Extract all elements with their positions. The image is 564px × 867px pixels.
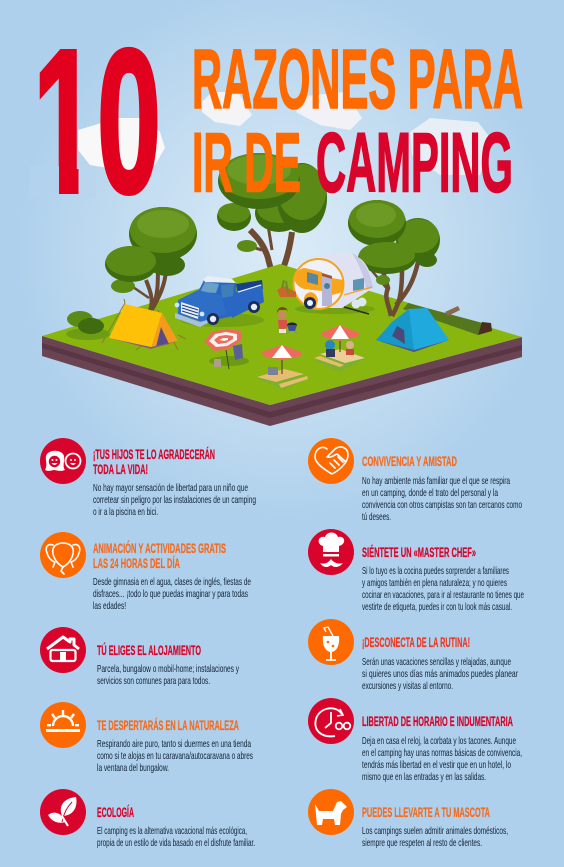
panel: reason 2 bbox=[40, 532, 251, 612]
picnic table: centre bbox=[256, 345, 308, 390]
panel: reason 8 bbox=[308, 619, 518, 692]
panel: reason 2: disfraces... ¡todo lo que puedas imaginar y para todas bbox=[93, 589, 248, 600]
panel: reason 8: excursiones y visitas al entorno. bbox=[362, 681, 453, 692]
heading: ¡DESCONECTA DE LA RUTINA! bbox=[362, 635, 470, 650]
body text: Parcela, bungalow o mobil-home; instalaciones y bbox=[97, 664, 240, 675]
icon: sunrise bbox=[40, 702, 86, 748]
tent: yellow bbox=[102, 299, 186, 350]
panel: reason 3 bbox=[40, 627, 240, 687]
icon: leaves bbox=[40, 789, 86, 835]
tree: centre bbox=[217, 153, 327, 290]
panel: reason 9 bbox=[308, 698, 522, 783]
panel: reason 2: LAS 24 HORAS DEL DÍA bbox=[93, 556, 180, 571]
heading: ECOLOGÍA bbox=[97, 805, 134, 820]
panel: reason 1: corretear sin peligro por las instalaciones de un camping bbox=[93, 495, 256, 506]
icon: children faces bbox=[40, 438, 86, 484]
panel: reason 4: como si te alojas en tu caravana/autocaravana o abres bbox=[97, 751, 253, 762]
heading: TE DESPERTARÁS EN LA NATURALEZA bbox=[97, 718, 239, 733]
umbrella and chairs: left bbox=[204, 329, 249, 369]
bush bbox=[66, 311, 110, 340]
clouds bbox=[78, 92, 492, 175]
panel: reason 4: la ventana del bungalow. bbox=[97, 763, 169, 774]
panel: reason 10: siempre que respeten al resto de clientes. bbox=[362, 838, 482, 849]
log bbox=[403, 303, 492, 335]
panel: reason 10 bbox=[308, 789, 508, 849]
panel: reason 9: mismo que en las entradas y en las salidas. bbox=[362, 772, 486, 783]
body text: Respirando aire puro, tanto si duermes en una tienda bbox=[97, 739, 251, 750]
panel: reason 1: TODA LA VIDA! bbox=[93, 462, 148, 477]
title number: 10: 10 bbox=[33, 7, 161, 236]
tent: blue bbox=[376, 308, 449, 352]
heading: ¡TUS HIJOS TE LO AGRADECERÁN bbox=[93, 447, 215, 462]
panel: reason 3: servicios son comunes para para todos. bbox=[97, 676, 210, 687]
icon: clock with infinity bbox=[308, 698, 354, 744]
heading: ANIMACIÓN Y ACTIVIDADES GRATIS bbox=[93, 541, 226, 556]
heading: SIÉNTETE UN «MASTER CHEF» bbox=[362, 545, 476, 560]
tree: left bbox=[105, 207, 197, 310]
icon: chef hat and moustache bbox=[308, 529, 354, 575]
body text: No hay mayor sensación de libertad para un niño que bbox=[93, 483, 248, 494]
body text: El camping es la alternativa vacacional más ecológica, bbox=[97, 826, 247, 837]
icon: handshake heart bbox=[308, 438, 354, 484]
icon: house bbox=[40, 627, 86, 673]
heading: CONVIVENCIA Y AMISTAD bbox=[362, 454, 457, 469]
body text: Desde gimnasia en el agua, clases de inglés, fiestas de bbox=[93, 577, 251, 588]
icon: dog bbox=[308, 789, 354, 835]
truck bbox=[175, 276, 264, 327]
picnic table: right bbox=[314, 325, 367, 372]
icon: cocktail bbox=[308, 619, 354, 665]
island: ground platform bbox=[42, 264, 522, 426]
panel: reason 7 bbox=[308, 529, 524, 613]
tree: right bbox=[348, 200, 440, 316]
panel: reason 6 bbox=[308, 438, 522, 523]
heading: TÚ ELIGES EL ALOJAMIENTO bbox=[97, 643, 201, 658]
panel: reason 6: tú desees. bbox=[362, 512, 391, 523]
text: IR DE bbox=[192, 116, 301, 210]
person and grill bbox=[277, 307, 297, 334]
caravan bbox=[277, 252, 375, 314]
panel: reason 4 bbox=[40, 702, 253, 774]
panel: reason 1 bbox=[40, 438, 256, 518]
icon: balloons bbox=[40, 532, 86, 578]
panel: reason 1: o ir a la piscina en bici. bbox=[93, 507, 158, 518]
panel: reason 2: las edades! bbox=[93, 601, 126, 612]
panel: reason 5 bbox=[40, 789, 255, 849]
panel: reason 5: propia de un estilo de vida basado en el disfrute familiar. bbox=[97, 838, 255, 849]
